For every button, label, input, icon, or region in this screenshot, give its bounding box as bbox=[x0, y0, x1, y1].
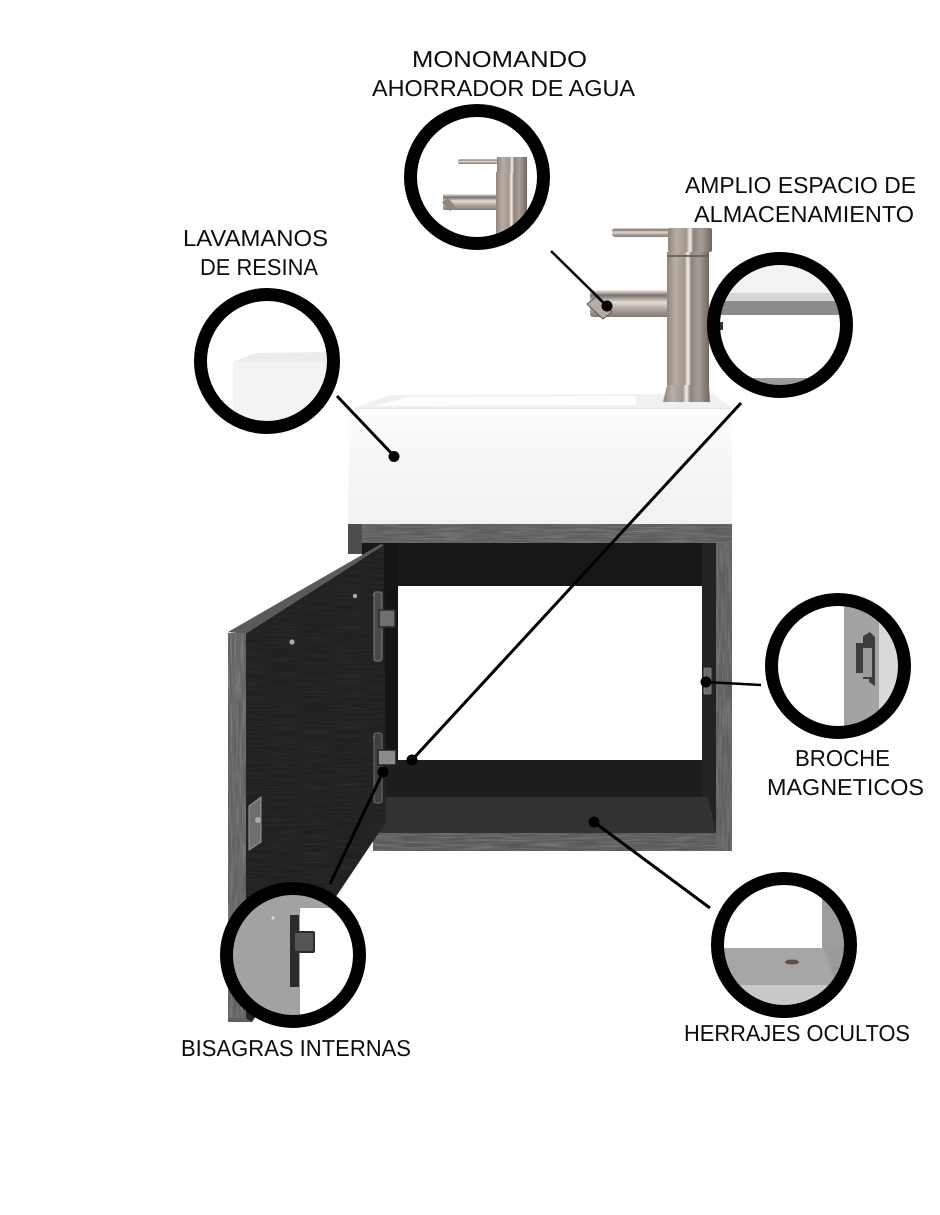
label: monomando: MONOMANDO bbox=[412, 46, 587, 72]
faucet cap bbox=[668, 228, 712, 252]
door screws bbox=[289, 593, 377, 739]
detail circle: sink bbox=[200, 294, 334, 430]
leader line: storage bbox=[406, 403, 741, 766]
leader line: hidden hardware bbox=[588, 816, 710, 908]
cabinet floor front edge bbox=[373, 833, 718, 851]
leader line: faucet bbox=[551, 251, 612, 312]
faucet base bbox=[663, 385, 710, 402]
sink inner bowl bbox=[375, 396, 636, 406]
sink basin bbox=[348, 394, 732, 524]
detail circle: storage bbox=[700, 250, 860, 398]
leader line: hinges bbox=[330, 766, 388, 884]
faucet aerator bbox=[587, 297, 612, 319]
lower hinge bbox=[374, 733, 396, 803]
faucet handle bbox=[612, 228, 670, 237]
detail circle: faucet bbox=[410, 110, 544, 252]
sink front face bbox=[348, 408, 732, 524]
detail circle: hinge bbox=[225, 888, 360, 1022]
label: broche: BROCHE bbox=[795, 745, 890, 771]
label: lavamanos: DE RESINA bbox=[200, 254, 319, 280]
cabinet left inner strip bbox=[380, 543, 398, 803]
label: broche: MAGNETICOS bbox=[767, 774, 924, 800]
vanity cabinet with open door bbox=[228, 524, 732, 1022]
leader line: sink bbox=[337, 396, 400, 462]
cabinet lower back panel bbox=[380, 760, 702, 798]
label: amplio espacio: ALMACENAMIENTO bbox=[694, 201, 914, 227]
label: lavamanos: LAVAMANOS bbox=[183, 225, 328, 251]
cabinet back upper dark panel bbox=[362, 543, 717, 586]
magnetic catch bbox=[704, 668, 711, 694]
label: herrajes: HERRAJES OCULTOS bbox=[684, 1020, 910, 1046]
faucet collar groove bbox=[667, 255, 709, 257]
sink top rim bbox=[355, 394, 732, 408]
label: amplio espacio: AMPLIO ESPACIO DE bbox=[685, 172, 916, 198]
detail circle: hidden hardware bbox=[715, 878, 857, 1015]
label: monomando: AHORRADOR DE AGUA bbox=[372, 75, 636, 101]
faucet bbox=[587, 228, 712, 402]
door inner face bbox=[245, 545, 386, 1022]
upper hinge bbox=[374, 592, 395, 661]
door magnetic plate bbox=[249, 797, 261, 850]
faucet body bbox=[667, 252, 709, 387]
cabinet right side edge bbox=[716, 541, 732, 851]
label: bisagras: BISAGRAS INTERNAS bbox=[181, 1035, 411, 1061]
door front edge bbox=[228, 633, 252, 1022]
cabinet top band bbox=[348, 524, 732, 554]
cabinet right inner wall bbox=[702, 543, 717, 843]
faucet spout bbox=[590, 290, 672, 317]
cabinet floor bbox=[373, 797, 716, 834]
door top edge bbox=[228, 544, 384, 634]
leader line: magnetic catch bbox=[700, 676, 761, 688]
detail circle: magnetic catch bbox=[772, 600, 909, 732]
